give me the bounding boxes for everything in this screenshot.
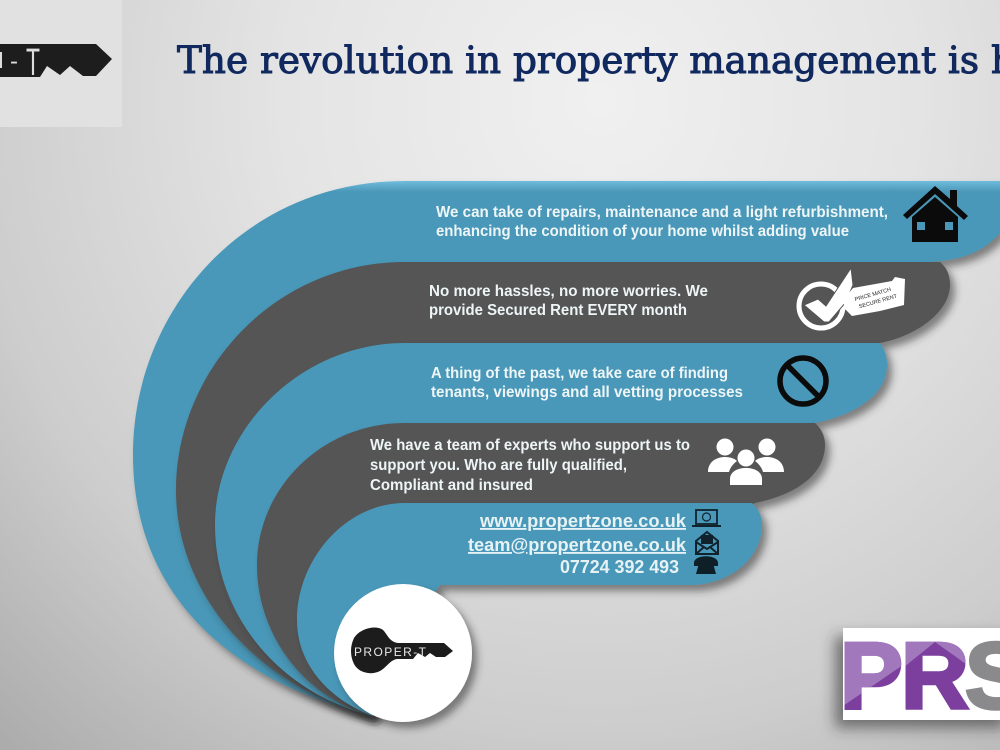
panel: finding tenants band — [215, 343, 887, 716]
icon: telephone — [694, 556, 718, 574]
header logo: key fragment — [0, 0, 122, 127]
icon: prohibition sign — [780, 358, 826, 404]
letter R: R — [901, 623, 969, 728]
finding tenants text: tenants, viewings and all vetting processes — [431, 384, 743, 401]
icon: check and price match tag — [799, 268, 905, 328]
panel: team of experts band — [257, 423, 825, 716]
repairs text — [436, 204, 888, 240]
contact details — [468, 510, 687, 577]
title: The revolution in property management is h — [177, 39, 1000, 82]
letter R: R — [901, 623, 969, 728]
team of experts text — [370, 437, 690, 494]
letter P: P — [840, 623, 903, 728]
icon: envelope — [696, 532, 718, 554]
PRS logo — [840, 623, 1000, 728]
contact details: team@propertzone.co.uk — [468, 534, 687, 555]
secured rent text — [429, 283, 708, 319]
secured rent text: No more hassles, no more worries. We — [429, 283, 708, 300]
letter P — [844, 642, 902, 710]
repairs text: enhancing the condition of your home whilst adding value — [436, 223, 849, 240]
secured rent text: provide Secured Rent EVERY month — [429, 302, 687, 319]
finding tenants text: A thing of the past, we take care of finding — [431, 365, 728, 382]
icon: check and price match tag: PRICE MATCH — [854, 287, 892, 303]
header logo: key fragment: T — [26, 42, 40, 84]
panel: contact band — [297, 503, 762, 716]
team of experts text: We have a team of experts who support us to — [370, 437, 690, 454]
team of experts text: support you. Who are fully qualified, — [370, 457, 627, 474]
icon: laptop — [692, 510, 721, 527]
header logo: key fragment: - — [10, 48, 18, 75]
key: PROPER-T — [354, 645, 427, 659]
letter P: P — [840, 623, 903, 728]
letter R — [906, 642, 970, 710]
contact details: www.propertzone.co.uk — [479, 510, 687, 531]
finding tenants text — [431, 365, 743, 401]
team of experts text: Compliant and insured — [370, 477, 533, 494]
repairs text: We can take of repairs, maintenance and a light refurbishment, — [436, 204, 888, 221]
icon: check and price match tag: SECURE RENT — [858, 293, 898, 310]
icon: house — [903, 186, 968, 242]
panel: secured rent band — [176, 262, 950, 716]
contact details: 07724 392 493 — [560, 556, 679, 577]
icon: people group — [708, 438, 784, 485]
panel: repairs band — [133, 181, 1000, 716]
circle logo — [334, 584, 472, 722]
